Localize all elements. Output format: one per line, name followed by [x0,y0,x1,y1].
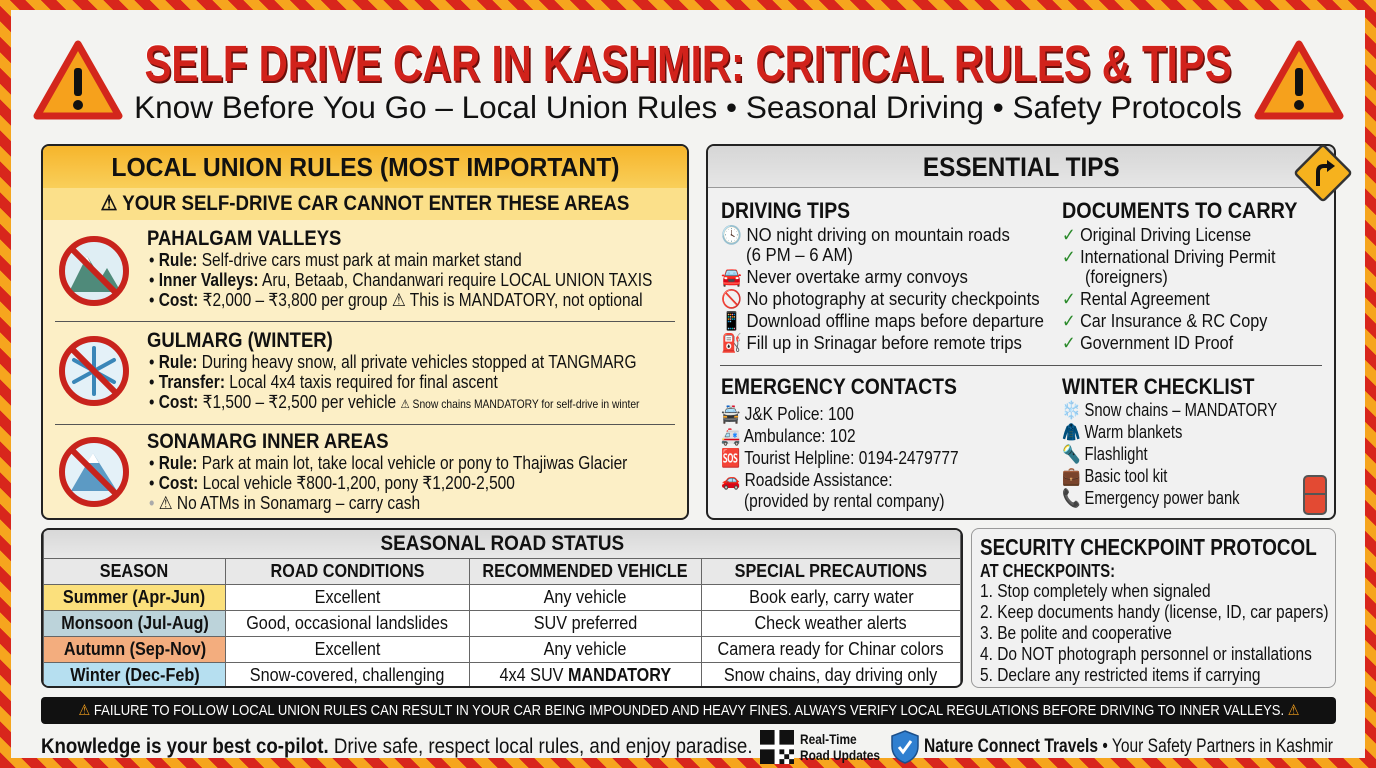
panel: security checkpoint protocol: SECURITY CHECKPOINT PROTOCOL [980,534,1317,560]
block: documents: ✓ Rental Agreement [1062,289,1210,309]
block: documents: ✓ Government ID Proof [1062,333,1233,353]
section: sonamarg: • Cost: Local vehicle ₹800-1,200, pony ₹1,200-2,500 [149,473,515,493]
panel: seasonal road status table: Excellent [315,586,380,606]
icon: no snow [59,336,129,406]
block: documents: (foreigners) [1085,267,1168,287]
qr label: Real-Time [800,731,857,747]
panel: security checkpoint protocol: 5. Declare any restricted items if carrying [980,665,1260,685]
footer tagline: Knowledge is your best co-pilot. Drive safe, respect local rules, and enjoy paradise. [41,735,753,758]
panel: seasonal road status table [41,528,963,688]
title: SELF DRIVE CAR IN KASHMIR: CRITICAL RULES & TIPS [144,35,1232,92]
block: driving tips: ⛽ Fill up in Srinagar before remote trips [721,333,1022,353]
block: emergency contacts: 🚑 Ambulance: 102 [721,426,856,446]
panel: security checkpoint protocol: 2. Keep documents handy (license, ID, car papers) [980,602,1328,622]
block: emergency contacts: 🚗 Roadside Assistance: [721,470,893,490]
section: pahalgam [59,227,652,310]
heading: local union rules: LOCAL UNION RULES (MOST IMPORTANT) [111,152,619,182]
section: pahalgam: • Cost: ₹2,000 – ₹3,800 per group ⚠ This is MANDATORY, not optional [149,290,643,310]
panel: seasonal road status table: Check weather alerts [755,612,907,632]
block: winter checklist: 💼 Basic tool kit [1062,466,1167,486]
panel: seasonal road status table: Good, occasional landslides [247,612,448,632]
qr label [800,731,880,763]
icon: warning triangle right [1254,40,1344,120]
panel: seasonal road status table: Snow-covered, challenging [250,664,445,684]
section: gulmarg: • Rule: During heavy snow, all private vehicles stopped at TANGMARG [149,352,637,372]
block: winter checklist: 📞 Emergency power bank [1062,488,1240,508]
panel: seasonal road status table: Summer (Apr-Jun) [63,586,206,606]
panel: seasonal road status table: Monsoon (Jul-Aug) [61,612,208,632]
panel: security checkpoint protocol: 1. Stop completely when signaled [980,581,1211,601]
panel: local union rules [41,144,689,520]
section: sonamarg: SONAMARG INNER AREAS [147,430,389,453]
section: sonamarg [59,430,628,513]
block: emergency contacts: (provided by rental company) [744,491,944,511]
section: sonamarg: • ⚠ No ATMs in Sonamarg – carry cash [149,493,420,513]
panel: seasonal road status table: Book early, carry water [749,586,913,606]
panel: security checkpoint protocol: AT CHECKPOINTS: [980,561,1115,581]
block: driving tips: 🚘 Never overtake army convoys [721,267,968,287]
block: driving tips: 🚫 No photography at security checkpoints [721,289,1040,309]
panel: essential tips [706,144,1336,520]
banner: warning: ⚠ FAILURE TO FOLLOW LOCAL UNION RULES CAN RESULT IN YOUR CAR BEING IMPOUNDED AND HEAVY FINES. ALWAYS VERIFY LOCAL REGULATIONS BEFORE DRIVING TO INNER VALLEYS. ⚠ [78,702,1299,719]
panel: seasonal road status table: ROAD CONDITIONS [271,560,424,580]
heading: local union rules [43,146,687,188]
block: emergency contacts: 🆘 Tourist Helpline: 0194-2479777 [721,448,959,468]
subtitle: Know Before You Go – Local Union Rules • Seasonal Driving • Safety Protocols [134,89,1242,125]
panel: seasonal road status table: Snow chains, day driving only [724,664,938,684]
panel: security checkpoint protocol: 4. Do NOT photograph personnel or installations [980,644,1312,664]
section: gulmarg [59,329,640,412]
block: winter checklist: 🧥 Warm blankets [1062,422,1182,442]
icon: emergency kit [1303,475,1327,515]
section: gulmarg: • Transfer: Local 4x4 taxis required for final ascent [149,372,498,392]
icon: shield [891,730,919,764]
section: pahalgam: PAHALGAM VALLEYS [147,227,341,250]
icon: no mountains [59,236,129,306]
icon: warning triangle left [34,40,122,120]
block: winter checklist: WINTER CHECKLIST [1062,374,1255,399]
block: driving tips: DRIVING TIPS [721,198,850,223]
heading: essential tips [708,146,1334,188]
block: documents: ✓ International Driving Permit [1062,247,1275,267]
panel: seasonal road status table: 4x4 SUV MANDATORY [500,664,671,684]
subheading: cannot enter [43,188,687,220]
block: documents: ✓ Car Insurance & RC Copy [1062,311,1267,331]
footer brand: Nature Connect Travels • Your Safety Partners in Kashmir [924,736,1333,757]
block: documents: DOCUMENTS TO CARRY [1062,198,1297,223]
subheading: cannot enter: ⚠ YOUR SELF-DRIVE CAR CANNOT ENTER THESE AREAS [101,192,629,215]
block: documents: ✓ Original Driving License [1062,225,1251,245]
icon: road sign [1294,145,1352,202]
panel: security checkpoint protocol [971,528,1336,688]
block: winter checklist: ❄️ Snow chains – MANDATORY [1062,400,1277,420]
panel: seasonal road status table: SUV preferred [534,612,637,632]
section: sonamarg: • Rule: Park at main lot, take local vehicle or pony to Thajiwas Glacier [149,453,627,473]
block: driving tips [721,198,1044,353]
block: driving tips: (6 PM – 6 AM) [746,245,853,265]
panel: seasonal road status table: Camera ready for Chinar colors [718,638,944,658]
block: winter checklist: 🔦 Flashlight [1062,444,1148,464]
block: driving tips: 🕓 NO night driving on mountain roads [721,225,1010,245]
section: pahalgam: • Inner Valleys: Aru, Betaab, Chandanwari require LOCAL UNION TAXIS [149,270,652,290]
section: gulmarg: • Cost: ₹1,500 – ₹2,500 per vehicle ⚠ Snow chains MANDATORY for self-drive in winter [149,392,639,412]
panel: seasonal road status table: Excellent [315,638,380,658]
icon: qr code [760,730,794,764]
block: documents [1062,198,1298,353]
banner: warning [41,697,1336,724]
icon: no glacier [59,437,129,507]
section: pahalgam: • Rule: Self-drive cars must park at main market stand [149,250,522,270]
panel: seasonal road status table: SEASONAL ROAD STATUS [380,532,624,555]
panel: seasonal road status table: Winter (Dec-Feb) [70,664,199,684]
qr label: Road Updates [800,747,880,763]
panel: seasonal road status table: SPECIAL PRECAUTIONS [735,560,927,580]
block: emergency contacts [721,374,959,511]
panel: seasonal road status table: SEASON [100,560,169,580]
block: emergency contacts: EMERGENCY CONTACTS [721,374,957,399]
panel: seasonal road status table: RECOMMENDED VEHICLE [483,560,688,580]
panel: seasonal road status table: Any vehicle [544,638,627,658]
section: gulmarg: GULMARG (WINTER) [147,329,333,352]
panel: seasonal road status table: Any vehicle [544,586,627,606]
heading: essential tips: ESSENTIAL TIPS [923,152,1119,182]
panel: seasonal road status table: Autumn (Sep-Nov) [63,638,206,658]
panel: security checkpoint protocol: 3. Be polite and cooperative [980,623,1172,643]
block: driving tips: 📱 Download offline maps before departure [721,311,1044,331]
block: emergency contacts: 🚔 J&K Police: 100 [721,404,854,424]
block: winter checklist [1062,374,1277,508]
